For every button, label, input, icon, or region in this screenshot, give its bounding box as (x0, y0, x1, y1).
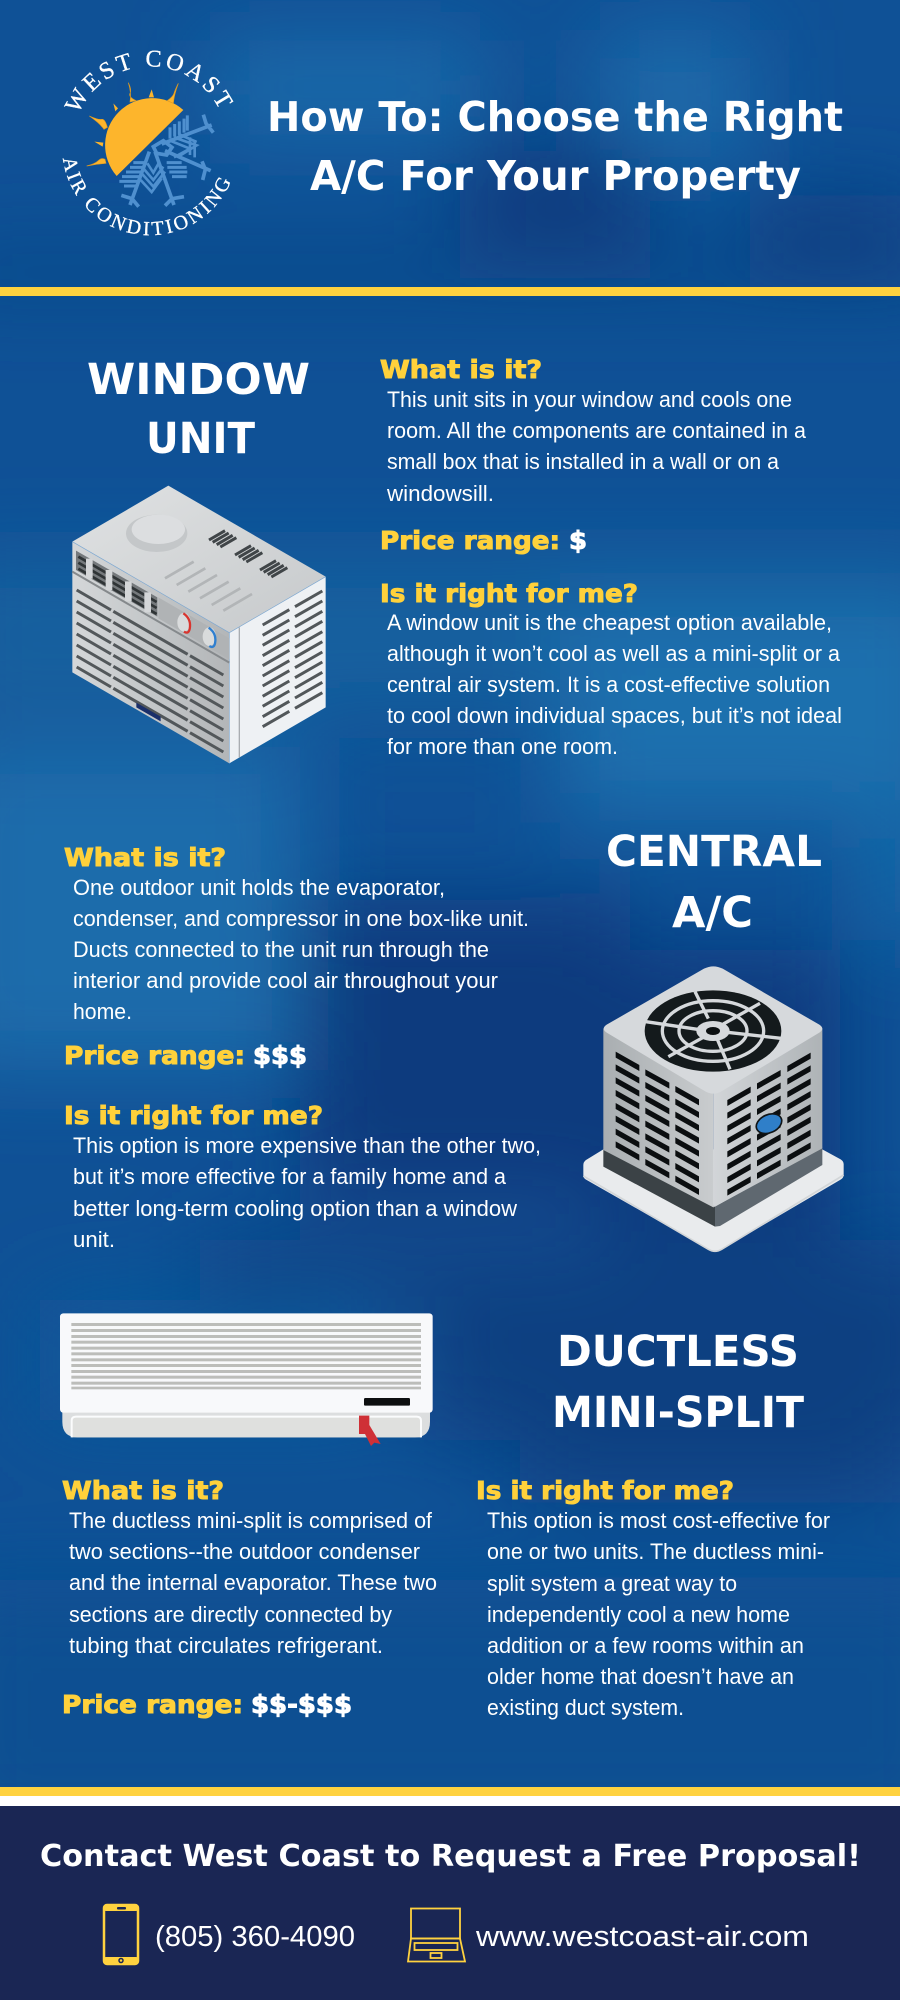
text block: mini-split is it right for me: split system a great way to (487, 1571, 737, 1596)
text block: central a/c is it right for me: unit. (73, 1227, 115, 1252)
heading: window unit: WINDOW (87, 355, 310, 405)
logo sun (87, 83, 183, 176)
heading: ductless mini-split (552, 1327, 805, 1438)
title: A/C For Your Property (310, 152, 801, 200)
icon: ductless mini-split indoor unit (60, 1313, 433, 1446)
heading: window unit (87, 355, 310, 464)
text block: mini-split what is it: What is it? (62, 1476, 224, 1505)
footer panel: contact (0, 1787, 900, 2000)
text block: mini-split what is it: sections are directly connected by (69, 1602, 392, 1627)
heading: central a/c (606, 827, 822, 938)
heading: central a/c: A/C (672, 888, 753, 938)
footer heading: Contact West Coast to Request a Free Proposal! (40, 1839, 861, 1874)
phone number: (805) 360-4090 (155, 1921, 355, 1953)
text block: window unit is it right for me: although it won’t cool as well as a mini-split or a (387, 641, 841, 666)
text block: central a/c what is it: Ducts connected to the unit run through the (73, 937, 489, 962)
text block: mini-split is it right for me: older home that doesn’t have an (487, 1664, 794, 1689)
text block: mini-split what is it: two sections--the outdoor condenser (69, 1539, 420, 1564)
heading: window unit: UNIT (146, 414, 256, 464)
text block: window unit is it right for me: to cool down individual spaces, but it’s not ideal (387, 703, 842, 728)
text block: mini-split is it right for me: This option is most cost-effective for (487, 1508, 830, 1533)
text block: central a/c price range: $$$ (253, 1041, 307, 1070)
text block: window unit what is it (380, 355, 807, 506)
text block: central a/c is it right for me (64, 1101, 541, 1252)
text block: central a/c what is it: What is it? (64, 843, 226, 872)
text block: central a/c what is it: home. (73, 999, 132, 1024)
logo ring text: AIR CONDITIONING (62, 158, 230, 236)
text block: central a/c what is it: condenser, and compressor in one box-like unit. (73, 906, 529, 931)
text block: mini-split what is it: The ductless mini-split is comprised of (69, 1508, 433, 1533)
icon: smartphone (104, 1905, 138, 1964)
text block: window unit is it right for me: Is it right for me? (380, 579, 638, 608)
website: www.westcoast-air.com (475, 1921, 809, 1953)
text block: central a/c is it right for me: but it’s more effective for a family home and a (73, 1164, 507, 1189)
text block: mini-split is it right for me (476, 1476, 830, 1720)
text block: central a/c what is it (64, 843, 529, 1024)
text block: mini-split is it right for me: independently cool a new home (487, 1602, 790, 1627)
title: How To: Choose the Right (267, 93, 843, 141)
heading: ductless mini-split: MINI-SPLIT (552, 1388, 805, 1438)
text block: central a/c what is it: One outdoor unit holds the evaporator, (73, 875, 445, 900)
header yellow rule (0, 287, 900, 296)
text block: window unit what is it: windowsill. (386, 481, 494, 506)
heading: central a/c: CENTRAL (606, 827, 822, 877)
text block: window unit is it right for me (380, 579, 842, 759)
text block: central a/c price range: Price range: (64, 1041, 245, 1070)
logo: West Coast Air Conditioning (62, 50, 234, 236)
logo ring text (62, 50, 234, 236)
text block: window unit what is it: small box that is installed in a wall or on a (387, 449, 780, 474)
icon: central air condenser unit (583, 966, 844, 1251)
text block: window unit what is it: This unit sits in your window and cools one (387, 387, 792, 412)
text block: window unit price range: Price range: (380, 526, 560, 555)
title (267, 93, 843, 200)
text block: mini-split is it right for me: Is it right for me? (476, 1476, 734, 1505)
text block: central a/c is it right for me: Is it right for me? (64, 1101, 323, 1130)
text block: window unit is it right for me: for more than one room. (387, 734, 618, 759)
text block: mini-split what is it (62, 1476, 437, 1658)
text block: central a/c is it right for me: better long-term cooling option than a window (73, 1196, 517, 1221)
logo snowflake (119, 115, 213, 207)
text block: mini-split what is it: tubing that circulates refrigerant. (69, 1633, 383, 1658)
icon: window air conditioner (72, 486, 326, 763)
text block: window unit what is it: What is it? (380, 355, 542, 384)
text block: window unit what is it: room. All the components are contained in a (387, 418, 807, 443)
text block: mini-split price range (62, 1690, 352, 1719)
text block: central a/c what is it: interior and provide cool air throughout your (73, 968, 498, 993)
text block: central a/c is it right for me: This option is more expensive than the other two, (73, 1133, 541, 1158)
heading: ductless mini-split: DUCTLESS (557, 1327, 799, 1377)
text block: mini-split price range: $$-$$$ (251, 1690, 352, 1719)
icon: laptop (408, 1908, 465, 1962)
text block: window unit price range: $ (569, 526, 587, 555)
text block: mini-split is it right for me: addition or a few rooms within an (487, 1633, 804, 1658)
text block: mini-split price range: Price range: (62, 1690, 243, 1719)
text block: window unit is it right for me: A window unit is the cheapest option available, (387, 610, 832, 635)
text block: mini-split what is it: and the internal evaporator. These two (69, 1570, 437, 1595)
text block: mini-split is it right for me: one or two units. The ductless mini- (487, 1539, 824, 1564)
logo ring text: WEST COAST (64, 50, 234, 109)
text block: window unit is it right for me: central air system. It is a cost-effective solution (387, 672, 830, 697)
text block: mini-split is it right for me: existing duct system. (487, 1695, 684, 1720)
